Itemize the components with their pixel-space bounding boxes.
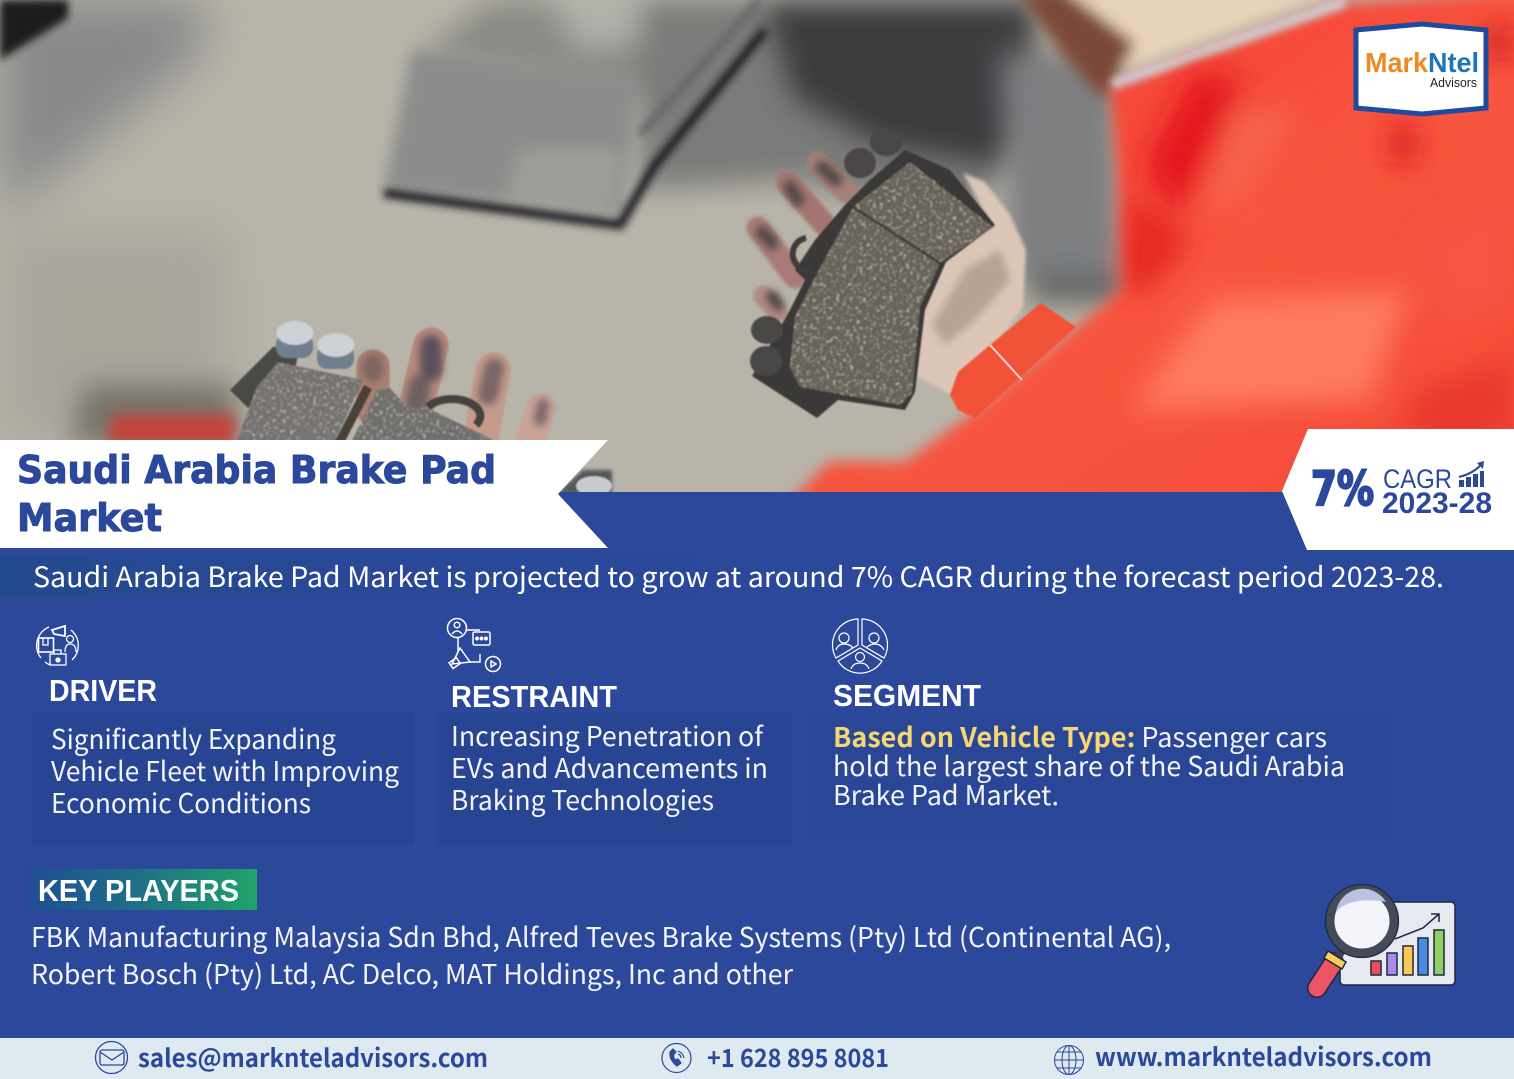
left finger grime	[373, 346, 543, 420]
segment text: hold the largest share of the Saudi Arabia	[833, 745, 1345, 784]
blue main background	[0, 492, 1514, 1038]
title: Market	[17, 496, 162, 540]
logo: MarkNtel Advisors: Advisors	[1430, 75, 1477, 90]
right brake pad	[750, 128, 995, 418]
photo: mechanic holding brake pads	[0, 0, 1514, 510]
icon: growth chart	[1459, 461, 1484, 487]
icon: restraint	[448, 618, 500, 672]
icon: magnifier over chart	[1317, 884, 1455, 988]
tagline strip	[0, 556, 1444, 598]
contact: email: sales@marknteladvisors.com	[138, 1039, 488, 1075]
restraint text: Braking Technologies	[451, 779, 714, 818]
restraint text	[451, 715, 768, 818]
forecast period: 2023-28	[1382, 487, 1492, 520]
logo: MarkNtel Advisors: MarkNtel	[1365, 47, 1479, 78]
contact: website: www.marknteladvisors.com	[1095, 1038, 1432, 1074]
right hand palm	[758, 163, 1026, 395]
key players list: FBK Manufacturing Malaysia Sdn Bhd, Alfred Teves Brake Systems (Pty) Ltd (Continental AG),	[31, 916, 1171, 955]
key players list	[31, 916, 1171, 992]
CAGR label: CAGR	[1383, 464, 1452, 494]
driver text: Significantly Expanding	[51, 718, 336, 757]
CAGR value: 7%	[1311, 462, 1374, 517]
icon: globe	[1054, 1046, 1084, 1074]
icon: segment	[833, 619, 887, 673]
title: Saudi Arabia Brake Pad	[17, 448, 496, 492]
left brake pad	[230, 321, 495, 445]
panel: driver	[33, 674, 414, 846]
driver text: Vehicle Fleet with Improving	[51, 750, 399, 789]
icon: phone	[662, 1044, 691, 1072]
panel: segment	[814, 679, 1392, 840]
head and shoulder	[1017, 0, 1345, 100]
footer bar	[0, 1038, 1514, 1079]
segment text: Based on Vehicle Type: Passenger cars	[833, 716, 1327, 755]
finger and palm grime	[762, 167, 1010, 345]
red cuff	[950, 303, 1076, 418]
segment text	[833, 716, 1345, 813]
key players list: Robert Bosch (Pty) Ltd, AC Delco, MAT Holdings, Inc and other	[31, 953, 794, 992]
title	[17, 448, 496, 540]
red jacket	[780, 0, 1514, 510]
CAGR badge	[1282, 429, 1514, 550]
panel: restraint	[436, 680, 792, 846]
panel: key players	[30, 869, 1171, 992]
segment text: Brake Pad Market.	[833, 774, 1059, 813]
contact: phone: +1 628 895 8081	[707, 1039, 889, 1075]
segment heading: SEGMENT	[833, 679, 981, 713]
driver text	[51, 718, 399, 821]
restraint heading: RESTRAINT	[451, 680, 617, 714]
driver text: Economic Conditions	[51, 782, 311, 821]
restraint text: EVs and Advancements in	[451, 747, 768, 786]
tagline text: Saudi Arabia Brake Pad Market is projected to grow at around 7% CAGR during the forecast period 2023-28.	[33, 556, 1444, 596]
key players heading: KEY PLAYERS	[38, 873, 239, 908]
icon: envelope	[96, 1042, 128, 1074]
restraint text: Increasing Penetration of	[451, 715, 764, 754]
title banner	[0, 440, 608, 548]
logo: MarkNtel Advisors	[1356, 24, 1486, 114]
left hand fingers	[373, 345, 541, 455]
driver heading: DRIVER	[49, 674, 157, 708]
icon: driver	[37, 626, 78, 665]
